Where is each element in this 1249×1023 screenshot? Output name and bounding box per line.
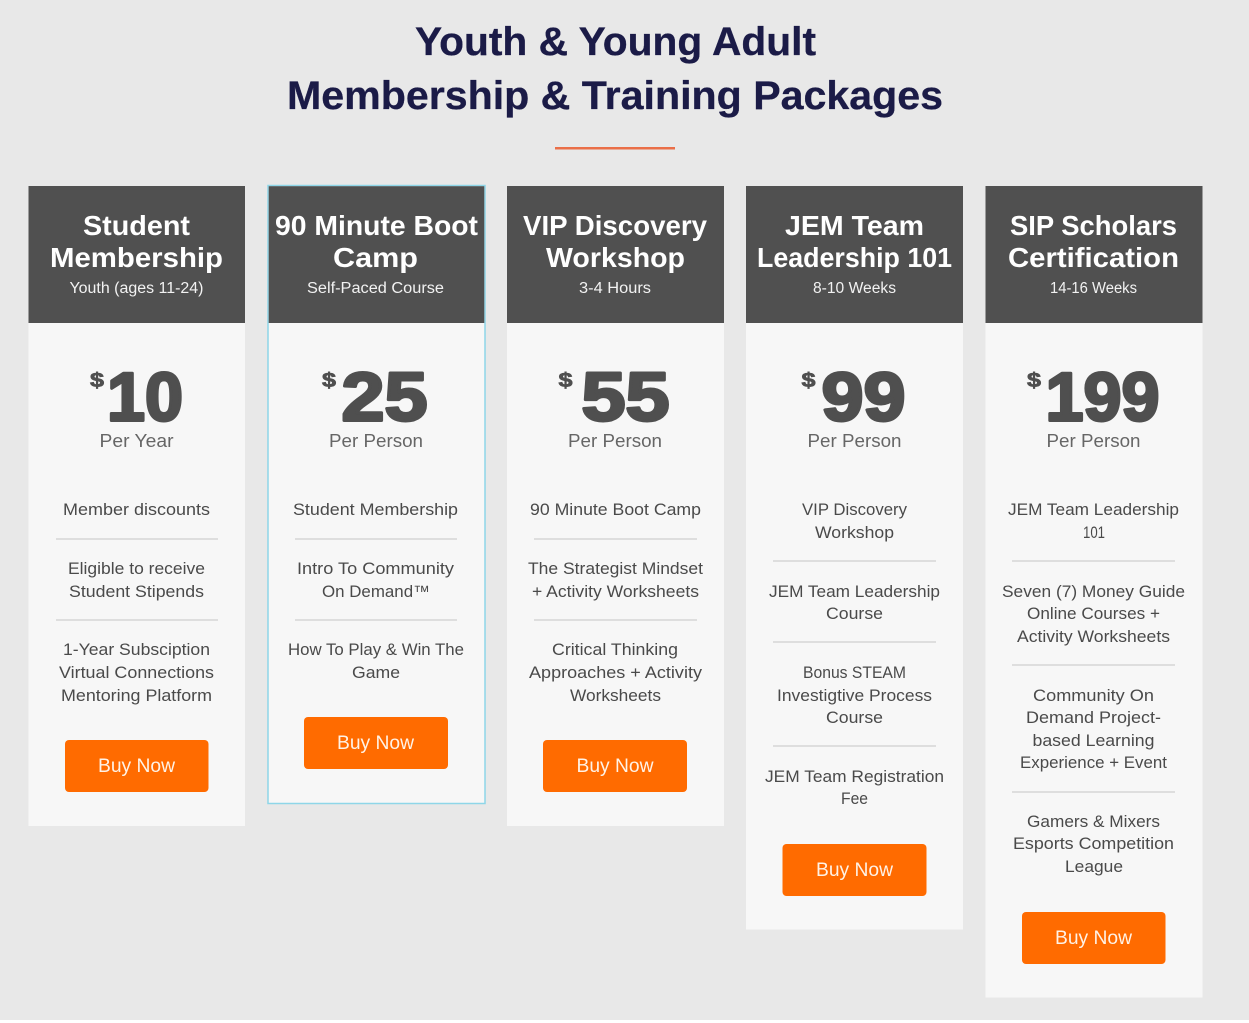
price: $10 per year <box>90 358 183 451</box>
feature list: Gamers & Mixers <box>1027 813 1160 831</box>
feature list: Online Courses + <box>1027 605 1160 623</box>
feature list <box>528 501 703 705</box>
price: $10 per year: $ <box>90 370 104 392</box>
feature list: Virtual Connections <box>59 664 214 682</box>
button: Buy Now: Buy Now <box>1055 928 1132 949</box>
header: JEM Team Leadership 101 <box>746 186 963 323</box>
feature list: Critical Thinking <box>552 641 678 659</box>
price: $99 per person: $ <box>802 370 816 392</box>
feature list: Course <box>826 605 883 623</box>
button: Buy Now: Buy Now <box>337 733 414 754</box>
header: JEM Team Leadership 101: 8-10 Weeks <box>813 280 896 297</box>
feature list: Investigtive Process <box>777 687 932 705</box>
feature list: 90 Minute Boot Camp <box>530 501 701 519</box>
button: Buy Now <box>65 740 208 792</box>
header: VIP Discovery Workshop: 3-4 Hours <box>579 280 651 297</box>
panel: SIP Scholars Certification <box>986 186 1202 998</box>
header: VIP Discovery Workshop: Workshop <box>546 242 685 273</box>
panel: VIP Discovery Workshop <box>507 186 724 826</box>
header: VIP Discovery Workshop: VIP Discovery <box>523 210 707 241</box>
button: Buy Now: Buy Now <box>98 756 175 777</box>
feature list <box>1002 501 1185 876</box>
feature list: Workshop <box>815 524 894 542</box>
feature list: Mentoring Platform <box>61 687 212 705</box>
price: $25 per person: 25 <box>342 358 428 436</box>
price: $99 per person <box>802 358 906 451</box>
price: $55 per person: Per Person <box>568 430 662 451</box>
price: $99 per person: 99 <box>822 358 906 436</box>
feature list: Eligible to receive <box>68 560 205 578</box>
price: $10 per year: 10 <box>107 358 183 436</box>
price: $199 per person: Per Person <box>1046 430 1140 451</box>
feature list <box>765 501 944 808</box>
feature list: based Learning <box>1032 732 1154 750</box>
feature list: VIP Discovery <box>802 501 908 519</box>
header: VIP Discovery Workshop <box>507 186 724 323</box>
header: 90 Minute Boot Camp <box>269 186 484 323</box>
header: SIP Scholars Certification: Certification <box>1008 242 1179 273</box>
panel: JEM Team Leadership 101 <box>746 186 963 930</box>
header: SIP Scholars Certification: 14-16 Weeks <box>1050 280 1137 297</box>
feature list <box>288 501 464 682</box>
feature list: Course <box>826 709 883 727</box>
button: Buy Now: Buy Now <box>816 860 893 881</box>
button: Buy Now: Buy Now <box>576 756 654 777</box>
panel: 90 Minute Boot Camp <box>268 186 485 804</box>
feature list: JEM Team Leadership <box>769 583 940 601</box>
header: 90 Minute Boot Camp: Camp <box>333 242 418 273</box>
header: JEM Team Leadership 101: Leadership 101 <box>757 242 952 273</box>
title: Membership & Training Packages <box>287 74 943 118</box>
feature list: On Demand™ <box>322 583 430 601</box>
price: $10 per year: Per Year <box>100 430 174 451</box>
price: $199 per person: $ <box>1027 370 1041 392</box>
price: $25 per person: $ <box>322 370 336 392</box>
feature list: 1-Year Subsciption <box>63 641 210 659</box>
header: JEM Team Leadership 101: JEM Team <box>785 210 924 241</box>
price: $25 per person <box>322 358 428 451</box>
button: Buy Now <box>543 740 687 792</box>
feature list: Member discounts <box>63 501 210 519</box>
feature list: Approaches + Activity <box>529 664 703 682</box>
feature list: Student Stipends <box>69 583 204 601</box>
feature list: Bonus STEAM <box>803 664 906 682</box>
header: Student Membership: Membership <box>50 242 223 273</box>
feature list: The Strategist Mindset <box>528 560 703 578</box>
feature list: How To Play & Win The <box>288 641 464 659</box>
header: Student Membership: Student <box>83 210 190 241</box>
feature list: Worksheets <box>570 687 661 705</box>
title: Youth & Young Adult <box>415 20 816 64</box>
panel: Student Membership <box>28 186 245 826</box>
feature list: Community On <box>1033 687 1154 705</box>
feature list: Game <box>352 664 400 682</box>
feature list: League <box>1065 858 1123 876</box>
feature list: Activity Worksheets <box>1017 628 1170 646</box>
feature list: Demand Project- <box>1026 709 1161 727</box>
price: $25 per person: Per Person <box>329 430 423 451</box>
feature list: JEM Team Leadership <box>1008 501 1179 519</box>
header: Student Membership: Youth (ages 11-24) <box>70 280 204 297</box>
price: $55 per person <box>558 358 670 451</box>
header: 90 Minute Boot Camp: 90 Minute Boot <box>275 210 478 241</box>
feature list: Intro To Community <box>297 560 455 578</box>
button: Buy Now <box>782 844 926 896</box>
feature list: Experience + Event <box>1020 754 1167 772</box>
price: $55 per person: 55 <box>582 358 670 436</box>
header: 90 Minute Boot Camp: Self-Paced Course <box>307 280 444 297</box>
feature list: 101 <box>1083 524 1105 542</box>
price: $99 per person: Per Person <box>808 430 902 451</box>
header: Student Membership <box>28 186 245 323</box>
feature list: Esports Competition <box>1013 835 1174 853</box>
header: SIP Scholars Certification: SIP Scholars <box>1010 210 1177 241</box>
feature list: JEM Team Registration <box>765 768 944 786</box>
price: $55 per person: $ <box>558 370 572 392</box>
feature list <box>56 501 218 705</box>
feature list: Student Membership <box>293 501 458 519</box>
feature list: Seven (7) Money Guide <box>1002 583 1185 601</box>
button: Buy Now <box>304 717 448 769</box>
feature list: + Activity Worksheets <box>532 583 699 601</box>
header: SIP Scholars Certification <box>986 186 1202 323</box>
price: $199 per person: 199 <box>1046 358 1160 436</box>
button: Buy Now <box>1022 912 1166 964</box>
title <box>287 20 943 118</box>
feature list: Fee <box>841 790 868 808</box>
